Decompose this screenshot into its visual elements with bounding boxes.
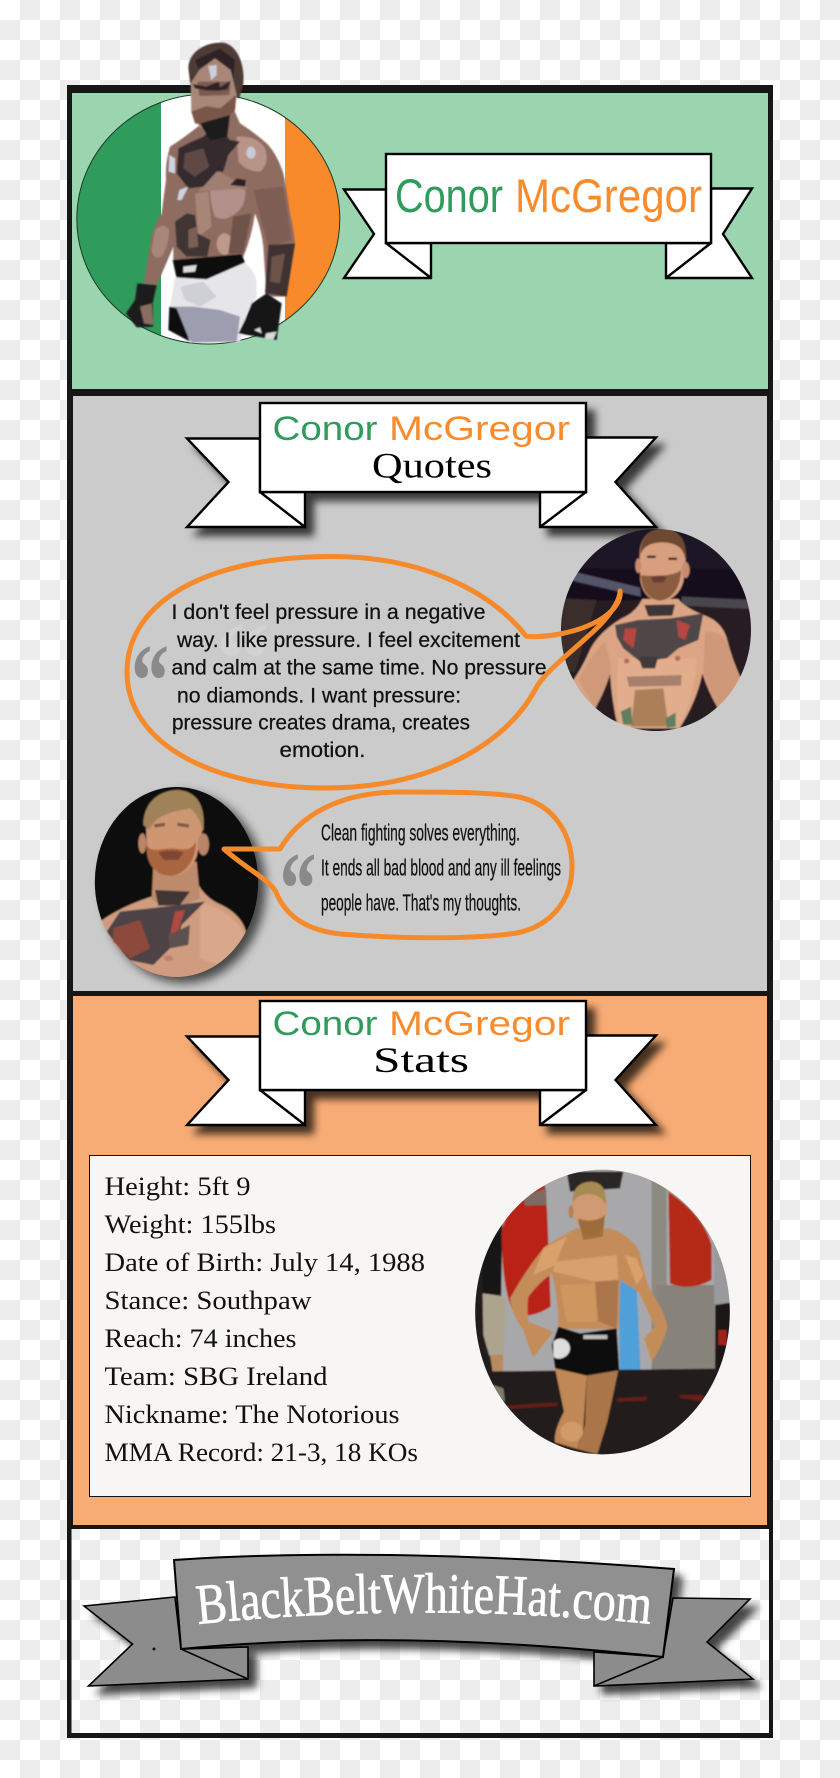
photo: McGregor looking up [94, 787, 258, 977]
ribbon: stats heading [187, 1001, 656, 1125]
quote text: It ends all bad blood and any ill feelings [321, 854, 561, 880]
quote text: and calm at the same time. No pressure [172, 656, 546, 680]
panel: quotes [73, 396, 767, 991]
stats list: Nickname: The Notorious [104, 1400, 400, 1429]
quote text [172, 600, 546, 762]
torso [572, 599, 741, 729]
speech bubble: clean fighting quote [224, 792, 572, 947]
quote text: no diamonds. I want pressure: [177, 684, 461, 708]
face [191, 58, 237, 127]
beard [191, 95, 236, 125]
heading: Quotes: Quotes [372, 446, 492, 486]
arms and torso base [144, 108, 295, 297]
irish flag circle [76, 94, 341, 344]
stats list: Weight: 155lbs [104, 1210, 276, 1239]
illustration: McGregor figure [126, 43, 295, 343]
heading: Conor McGregor: Conor [272, 410, 378, 448]
banner text: BlackBeltWhiteHat.com [196, 1572, 650, 1624]
ribbon: quotes heading [187, 403, 656, 527]
quote text: people have. That's my thoughts. [321, 890, 521, 916]
left glove [126, 283, 157, 327]
stats list [104, 1172, 425, 1467]
waistband [173, 254, 245, 279]
stats list: Stance: Southpaw [104, 1286, 312, 1315]
heading: Stats: Stats [373, 1040, 469, 1080]
panel: footer [72, 1529, 769, 1733]
heading: Conor McGregor: Conor [395, 169, 503, 222]
quote text [321, 820, 561, 916]
quote text: Clean fighting solves everything. [321, 820, 520, 846]
dot [152, 1648, 156, 1650]
hair [188, 43, 244, 98]
stats list: MMA Record: 21-3, 18 KOs [104, 1438, 418, 1467]
quote text: way. I like pressure. I feel excitement [176, 628, 520, 652]
athlete [510, 1228, 667, 1362]
heading: Conor McGregor: Conor [272, 1005, 378, 1043]
panel: stats [73, 996, 767, 1525]
stats list: Team: SBG Ireland [104, 1362, 328, 1391]
quote text: emotion. [280, 738, 366, 762]
body [100, 882, 246, 982]
white highlights [169, 155, 188, 200]
photo: McGregor with chest tattoo [555, 525, 755, 735]
head [640, 529, 686, 601]
tattoos [177, 123, 240, 188]
photo shadow [102, 793, 266, 983]
banner: BlackBeltWhiteHat.com [82, 1554, 766, 1701]
quote text: pressure creates drama, creates [172, 710, 470, 734]
bystander [483, 1232, 501, 1293]
legs [555, 1368, 587, 1449]
heading: Conor McGregor: McGregor [515, 169, 702, 222]
punching bags [502, 1185, 551, 1316]
stats list: Date of Birth: July 14, 1988 [104, 1248, 425, 1277]
tattoos [644, 604, 675, 616]
quote mark faint: “ [216, 600, 270, 717]
shorts [170, 263, 257, 343]
stats card [90, 1156, 750, 1496]
blue mat [618, 1272, 641, 1372]
ribbon: header title [344, 154, 752, 278]
heading: Conor McGregor: McGregor [389, 410, 570, 448]
stats list: Reach: 74 inches [104, 1324, 296, 1353]
floor [486, 1368, 718, 1454]
head [144, 808, 204, 875]
neck [152, 862, 200, 910]
lighter muscle patches [237, 136, 267, 172]
outer frame [67, 85, 773, 1738]
panel: header [72, 93, 768, 389]
photo: McGregor training [470, 1165, 735, 1460]
quote text: I don't feel pressure in a negative [172, 600, 486, 624]
heading: Conor McGregor: McGregor [389, 1005, 570, 1043]
speech bubble: pressure quote [127, 556, 620, 788]
quote mark: “ [131, 622, 169, 739]
quote mark: “ [280, 830, 316, 947]
shorts [552, 1327, 619, 1376]
right glove [238, 293, 282, 340]
chest tattoo [107, 902, 205, 965]
stats list: Height: 5ft 9 [104, 1172, 250, 1201]
